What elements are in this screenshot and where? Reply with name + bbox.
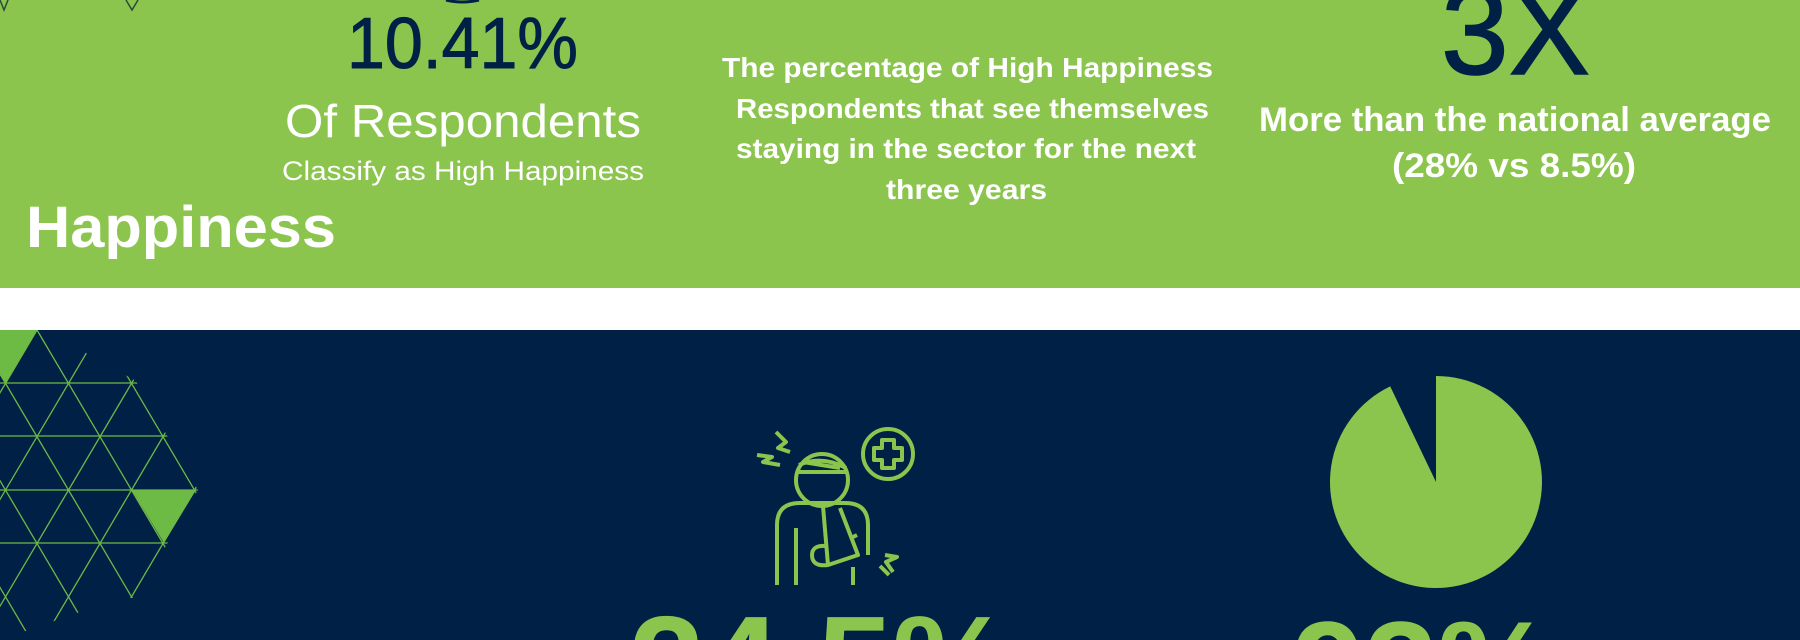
stat: 3X [1259,0,1771,185]
stat: 10.41%: Classify as High Happiness [282,156,644,186]
stat: 3X: More than the national average [1259,101,1771,139]
decorative triangle lattice [0,330,198,632]
text block: staying in sector: staying in the sector for the next [736,133,1196,164]
heading: Happiness: Happiness [26,195,336,260]
text block: staying in sector: The percentage of High Happiness [722,52,1213,83]
panel: navy band [0,330,1800,640]
text block: staying in sector [722,52,1213,205]
stat: 10.41%: 10.41% [347,4,578,84]
stat: 10.41% [282,4,644,186]
stat: 3X: (28% vs 8.5%) [1392,147,1636,185]
panel: happiness (green band) [0,0,1800,288]
icon: injured person [757,429,913,585]
stat: 10.41%: Of Respondents [285,95,641,147]
chart: pie 93% [1330,376,1542,588]
text block: staying in sector: three years [886,174,1047,205]
text block: staying in sector: Respondents that see themselves [736,93,1209,124]
